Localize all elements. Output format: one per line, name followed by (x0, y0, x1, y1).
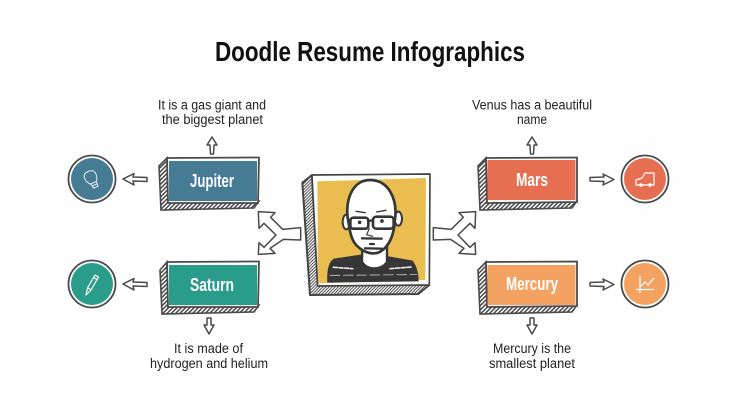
text: Jupiter description: It is a gas giant and (158, 98, 266, 112)
arrow: Mars right (590, 174, 614, 185)
text: Mercury description (489, 341, 575, 371)
panel: Mars box: Mars (516, 170, 548, 190)
yellow background (317, 178, 426, 283)
portrait person (327, 180, 419, 283)
moustache and goatee (362, 238, 382, 249)
text: Saturn description: hydrogen and helium (150, 356, 268, 371)
arrow: left fork (258, 212, 301, 254)
arrow: Mercury down (527, 318, 537, 334)
glasses (350, 218, 368, 229)
panel: Mercury box: Mercury (506, 274, 558, 294)
arrow: Saturn down (204, 318, 214, 334)
text: Mars description: Venus has a beautiful (472, 98, 592, 112)
head (347, 180, 395, 253)
icon: chart circle (622, 260, 668, 308)
frame face (312, 174, 430, 286)
panel: Mercury box (478, 262, 577, 314)
arrow: right fork (433, 212, 476, 254)
nose (367, 229, 373, 236)
panel: Jupiter box: Jupiter (190, 171, 234, 191)
text: Saturn description (150, 341, 268, 371)
arrow: Mars up (527, 137, 537, 154)
panel: Saturn box (160, 262, 259, 314)
arrow: Jupiter left (123, 174, 147, 185)
title: Doodle Resume Infographics (215, 36, 525, 67)
text: Mars description: name (517, 112, 547, 127)
panel: Jupiter box (159, 158, 259, 210)
neck (362, 246, 387, 268)
frame hatched side (302, 175, 429, 295)
arrow: Mercury right (590, 279, 614, 290)
panel: Mars box (478, 158, 577, 210)
panel: portrait frame (302, 174, 430, 295)
arrow: Jupiter up (207, 137, 217, 154)
icon: van circle (622, 156, 668, 202)
panel: Saturn box: Saturn (190, 275, 234, 295)
icon: pencil circle (68, 260, 116, 308)
eyes (358, 220, 361, 224)
text: Mercury description: smallest planet (489, 356, 575, 371)
text: Jupiter description (158, 98, 266, 127)
text: Mars description (472, 98, 592, 127)
brows (356, 210, 386, 213)
text: Saturn description: It is made of (174, 341, 243, 356)
text: Jupiter description: the biggest planet (162, 112, 263, 127)
text: Mercury description: Mercury is the (493, 341, 571, 356)
shirt (327, 255, 419, 283)
icon: lightbulb circle (68, 156, 116, 202)
ears (343, 215, 350, 229)
arrow: Saturn left (123, 278, 147, 290)
